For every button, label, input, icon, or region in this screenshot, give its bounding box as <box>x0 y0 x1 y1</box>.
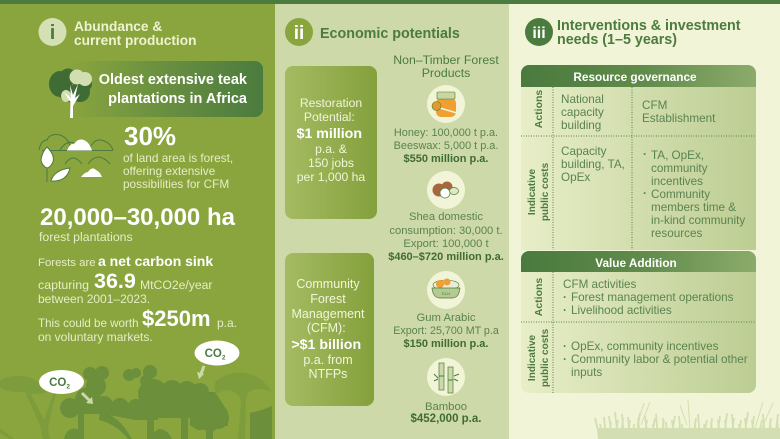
icon: section ii badge: ii <box>294 23 304 44</box>
table: resource governance: Actions <box>533 90 545 128</box>
text: shea: consumption: 30,000 t. <box>389 225 503 237</box>
callout: CO2 right <box>194 340 240 379</box>
icon: honey jar <box>427 85 465 123</box>
box: restoration potential: per 1,000 ha <box>297 170 365 184</box>
icon: section i badge <box>38 18 66 46</box>
table: value addition: OpEx, community incentives <box>571 340 719 353</box>
table: resource governance: Capacity <box>561 145 607 158</box>
icon: teak tree <box>49 68 92 118</box>
table: resource governance: OpEx <box>561 171 590 184</box>
heading: abundance: Abundance & <box>74 19 162 34</box>
box: community forest management: Management <box>292 307 365 321</box>
table: resource governance: Resource governance <box>573 70 697 84</box>
table: value addition: public costs <box>540 328 551 387</box>
text: gum arabic: $150 million p.a. <box>404 338 488 350</box>
box: restoration potential: p.a. & <box>315 142 347 156</box>
box: community forest management: p.a. from <box>303 353 353 367</box>
callout: CO2 right: CO <box>205 348 222 360</box>
heading: non-timber forest products: Products <box>422 66 470 80</box>
panel: interventions and investment needs <box>521 18 780 439</box>
table: value addition: CFM activities <box>563 278 637 291</box>
table: resource governance: resources <box>651 227 702 240</box>
table: value addition: inputs <box>571 366 602 379</box>
callout: CO2 right: 2 <box>222 354 226 362</box>
table: resource governance: building <box>561 119 601 132</box>
table: resource governance: building, TA, <box>561 158 625 171</box>
callout: CO2 left: CO <box>49 377 66 389</box>
panel: economic background <box>275 0 509 439</box>
heading: economic potentials: Economic potentials <box>320 26 460 42</box>
icon: section i badge: i <box>50 22 55 44</box>
table: value addition: Actions <box>533 278 545 316</box>
table: value addition: Value Addition <box>595 256 677 270</box>
table: resource governance: members time & <box>651 201 736 214</box>
text: honey: Beeswax: 5,000 t p.a. <box>394 140 498 152</box>
table: value addition: · <box>563 304 567 317</box>
table: resource governance: public costs <box>540 162 551 221</box>
text: carbon sink: MtCO2e/year <box>140 278 212 292</box>
text: gum arabic: Gum Arabic <box>416 312 476 324</box>
box: community forest management: (CFM): <box>307 321 346 335</box>
table: resource governance: community <box>651 162 708 175</box>
icon: gum arabic bowl: E414 <box>442 292 450 296</box>
stat: plantations: 20,000–30,000 ha <box>40 204 236 231</box>
illustration: grass <box>595 400 780 439</box>
text: gum arabic: Export: 25,700 MT p.a <box>393 325 499 337</box>
text: honey: Honey: 100,000 t p.a. <box>394 127 498 139</box>
heading: interventions: needs (1–5 years) <box>557 32 677 48</box>
box: restoration potential: $1 million <box>297 126 362 142</box>
heading: abundance: current production <box>74 33 196 48</box>
table: resource governance: incentives <box>651 175 703 188</box>
banner: oldest teak plantations: plantations in Africa <box>108 91 248 107</box>
text: forest plantations: forest plantations <box>39 230 133 244</box>
box: community forest management <box>285 253 374 406</box>
panel: interventions background <box>509 0 780 439</box>
table: resource governance: CFM <box>642 99 667 112</box>
text: bamboo: $452,000 p.a. <box>411 413 481 425</box>
icon: section ii badge <box>285 18 313 46</box>
icon: forest and leaves <box>39 135 113 182</box>
text: carbon sink: 36.9 <box>94 269 136 293</box>
table: resource governance: Establishment <box>642 112 716 125</box>
table: resource governance: National <box>561 93 604 106</box>
text: shea: Shea domestic <box>409 211 483 223</box>
box: restoration potential: 150 jobs <box>308 156 354 170</box>
text: shea: $460–$720 million p.a. <box>388 251 504 263</box>
icon: shea nuts <box>427 171 465 209</box>
box: community forest management: NTFPs <box>309 367 347 381</box>
table: resource governance: · <box>643 148 647 161</box>
text: bamboo: Bamboo <box>425 401 467 413</box>
text: carbon sink: on voluntary markets. <box>38 330 153 344</box>
text: carbon sink: capturing <box>38 278 89 292</box>
box: restoration potential: Restoration <box>300 96 362 110</box>
table: resource governance: capacity <box>561 106 604 119</box>
text: land area: of land area is forest, <box>123 151 233 165</box>
text: land area: offering extensive <box>123 164 216 178</box>
table: value addition: · <box>563 353 567 366</box>
table: value addition: · <box>563 340 567 353</box>
stat: 30 percent: 30% <box>124 121 176 151</box>
top bar <box>0 0 780 4</box>
table: value addition: Indicative <box>527 335 538 381</box>
text: carbon sink: Forests are <box>38 257 96 269</box>
panel: abundance background <box>0 0 275 439</box>
heading: non-timber forest products: Non–Timber Forest <box>393 53 499 67</box>
box: community forest management: Community <box>296 277 360 291</box>
text: carbon sink: a net carbon sink <box>98 253 213 269</box>
text: honey: $550 million p.a. <box>404 153 488 165</box>
text: carbon sink: $250m <box>142 306 211 331</box>
panel: economic potentials <box>285 18 504 425</box>
table: resource governance: · <box>643 187 647 200</box>
text: shea: Export: 100,000 t <box>403 238 489 250</box>
banner: oldest teak plantations: Oldest extensive teak <box>99 72 248 88</box>
box: restoration potential: Potential: <box>304 110 355 124</box>
panel: abundance and current production <box>0 18 272 439</box>
table: value addition: Livelihood activities <box>571 304 672 317</box>
table: value addition <box>521 251 756 393</box>
table: resource governance: Indicative <box>527 169 538 215</box>
box: restoration potential <box>285 66 377 219</box>
table: resource governance: Community <box>651 188 710 201</box>
table: value addition: Forest management operations <box>571 291 734 304</box>
table: resource governance: TA, OpEx, <box>651 149 704 162</box>
table: resource governance <box>521 65 756 250</box>
text: carbon sink: between 2001–2023. <box>38 292 150 306</box>
callout: CO2 left <box>39 370 93 404</box>
banner: oldest teak plantations <box>68 61 263 117</box>
icon: section iii badge: iii <box>532 25 546 42</box>
text: carbon sink: p.a. <box>217 316 237 330</box>
heading: interventions: Interventions & investment <box>557 18 741 34</box>
illustration: forest silhouette <box>0 365 272 439</box>
table: value addition: · <box>563 291 567 304</box>
icon: gum arabic bowl <box>427 271 465 309</box>
table: value addition: Community labor & potential other <box>571 353 748 366</box>
box: community forest management: >$1 billion <box>291 337 361 353</box>
callout: CO2 left: 2 <box>66 384 70 390</box>
table: resource governance: in-kind community <box>651 214 745 227</box>
icon: section iii badge <box>525 18 553 46</box>
box: community forest management: Forest <box>310 292 346 306</box>
text: land area: possibilities for CFM <box>123 177 229 191</box>
text: carbon sink: This could be worth <box>38 317 139 330</box>
icon: bamboo <box>427 358 465 396</box>
